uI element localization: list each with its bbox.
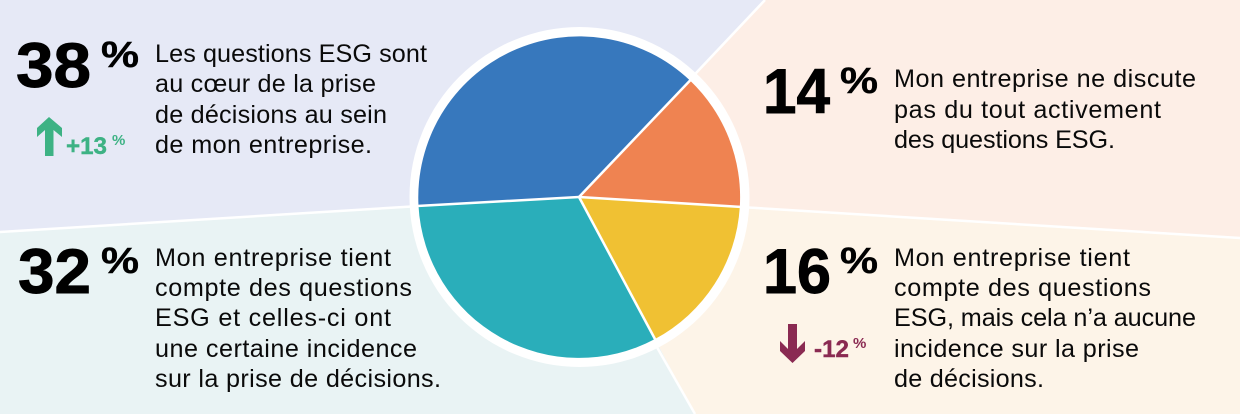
text: 16 % description: ESG, mais cela n’a aucune [894, 304, 1196, 332]
text: 16 % description [894, 244, 1196, 393]
change: -12 % [814, 335, 866, 363]
figure: 38 %: % [101, 34, 139, 75]
figure: 14 %: % [840, 60, 878, 101]
background panel: bottom right [579, 197, 1240, 414]
text: 14 % description: Mon entreprise ne discute [894, 65, 1196, 93]
slice: 14% [579, 80, 740, 207]
text: 16 % description: Mon entreprise tient [894, 244, 1130, 272]
text: 32 % description: ESG et celles-ci ont [155, 304, 391, 332]
icon: down arrow [780, 324, 805, 363]
change: -12 %: % [853, 335, 866, 352]
text: 38 % description: Les questions ESG sont [155, 40, 427, 68]
block: 14 % [763, 57, 1196, 154]
text: 38 % description: de décisions au sein [155, 101, 387, 129]
icon: up arrow [37, 117, 62, 156]
figure: 16 %: % [840, 240, 878, 281]
text: 32 % description: une certaine incidence [155, 335, 417, 363]
figure: 32 % [18, 237, 139, 307]
slice: 32% [418, 197, 655, 358]
block: 32 % [18, 237, 441, 393]
change: +13 % [66, 132, 125, 160]
text: 16 % description: incidence sur la prise [894, 335, 1139, 363]
text: 32 % description [155, 244, 441, 393]
change: -12 %: -12 [814, 336, 849, 363]
background panel: bottom left [0, 197, 695, 414]
text: 16 % description: de décisions. [894, 365, 1044, 393]
figure: 14 % [763, 57, 878, 127]
figure: 16 % [763, 237, 878, 307]
change: +13 %: +13 [66, 133, 107, 160]
text: 14 % description [894, 65, 1196, 154]
change: +13 %: % [112, 132, 125, 149]
block: 38 % [16, 31, 427, 160]
background panel: top right [579, 0, 1240, 238]
figure: 38 %: 38 [16, 31, 91, 101]
text: 14 % description: pas du tout activement [894, 96, 1161, 124]
background panel: top left [0, 0, 765, 232]
figure: 38 % [16, 31, 139, 101]
slice: 16% [579, 197, 740, 339]
text: 32 % description: Mon entreprise tient [155, 244, 391, 272]
figure: 14 %: 14 [763, 57, 830, 127]
text: 38 % description [155, 40, 427, 159]
text: 38 % description: au cœur de la prise [155, 70, 376, 98]
text: 16 % description: compte des questions [894, 274, 1151, 302]
figure: 32 %: 32 [18, 237, 91, 307]
figure: 32 %: % [101, 240, 139, 281]
block: 16 % [763, 237, 1196, 393]
text: 38 % description: de mon entreprise. [155, 131, 372, 159]
text: 14 % description: des questions ESG. [894, 126, 1115, 154]
text: 32 % description: compte des questions [155, 274, 412, 302]
figure: 16 %: 16 [763, 237, 831, 307]
pie chart [410, 27, 750, 367]
slice: 38% [418, 36, 690, 206]
text: 32 % description: sur la prise de décisions. [155, 365, 441, 393]
